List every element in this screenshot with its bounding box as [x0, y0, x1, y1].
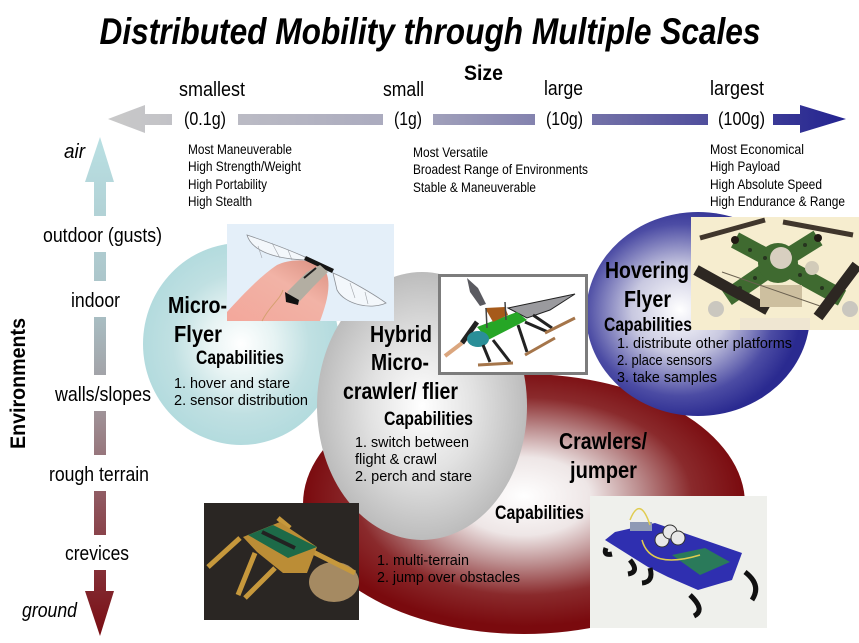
- smallest traits: High Strength/Weight: [188, 158, 301, 174]
- size scale labels: (0.1g): [184, 109, 226, 129]
- hybrid capabilities: [355, 409, 473, 485]
- largest traits: High Payload: [710, 158, 780, 174]
- micro-flyer heading: Flyer: [174, 321, 222, 347]
- environments labels: indoor: [71, 290, 120, 312]
- hybrid capabilities: Capabilities: [384, 409, 473, 430]
- size scale labels: largest: [710, 78, 764, 100]
- largest traits: Most Economical: [710, 141, 804, 157]
- crawlers capabilities: Capabilities: [495, 503, 584, 524]
- title: Distributed Mobility through Multiple Scales: [100, 11, 760, 52]
- crawlers heading: [559, 428, 648, 483]
- hybrid capabilities: 1. switch between: [355, 435, 469, 451]
- hovering flyer capabilities: 1. distribute other platforms: [617, 336, 792, 352]
- hybrid heading: Hybrid: [370, 321, 432, 347]
- environments axis title: Environments: [7, 318, 30, 449]
- crawlers capabilities: 1. multi-terrain: [377, 553, 469, 569]
- ellipse: hovering flyer: [586, 212, 810, 416]
- size scale labels: [179, 62, 765, 129]
- crawlers heading: Crawlers/: [559, 428, 648, 454]
- micro-flyer capabilities: 1. hover and stare: [174, 376, 290, 392]
- largest traits: High Absolute Speed: [710, 176, 822, 192]
- size scale labels: (100g): [718, 109, 765, 129]
- small/large traits: Stable & Maneuverable: [413, 179, 536, 195]
- hybrid heading: [343, 321, 458, 404]
- small/large traits: Most Versatile: [413, 144, 488, 160]
- micro-flyer capabilities: Capabilities: [196, 348, 284, 369]
- environments labels: ground: [22, 600, 78, 622]
- small/large traits: Broadest Range of Environments: [413, 161, 588, 177]
- hovering flyer capabilities: 3. take samples: [617, 370, 717, 386]
- environments labels: rough terrain: [49, 464, 149, 486]
- hovering flyer capabilities: Capabilities: [604, 315, 692, 336]
- environments labels: air: [64, 141, 86, 163]
- smallest traits: High Portability: [188, 176, 267, 192]
- micro-flyer heading: [168, 292, 227, 347]
- size scale labels: small: [383, 79, 424, 101]
- crawlers capabilities: [377, 503, 584, 586]
- small/large traits: [413, 144, 588, 195]
- size scale arrow: [108, 105, 846, 133]
- hovering flyer heading: [605, 257, 689, 312]
- ellipse: hybrid crawler/flier: [317, 272, 527, 540]
- ellipse: crawlers/jumper: [303, 374, 745, 634]
- smallest traits: High Stealth: [188, 193, 252, 209]
- hovering flyer heading: Flyer: [624, 286, 671, 312]
- hybrid heading: crawler/ flier: [343, 378, 458, 404]
- environments labels: outdoor (gusts): [43, 225, 162, 247]
- photo: micro-flyer on finger: [227, 224, 394, 321]
- size scale labels: (1g): [394, 109, 422, 129]
- hybrid heading: Micro-: [371, 349, 429, 375]
- micro-flyer capabilities: 2. sensor distribution: [174, 393, 308, 409]
- size scale labels: smallest: [179, 79, 245, 101]
- size scale labels: Size: [464, 62, 503, 85]
- ellipse: micro-flyer: [143, 243, 339, 445]
- environments labels: [22, 141, 162, 622]
- size scale labels: large: [544, 78, 583, 100]
- crawlers heading: jumper: [569, 457, 637, 483]
- micro-flyer heading: Micro-: [168, 292, 227, 318]
- micro-flyer capabilities: [174, 348, 308, 409]
- size scale labels: (10g): [546, 109, 583, 129]
- photo: quadrotor: [691, 217, 859, 330]
- hybrid capabilities: flight & crawl: [355, 452, 437, 468]
- hybrid capabilities: 2. perch and stare: [355, 469, 472, 485]
- largest traits: [710, 141, 845, 209]
- environments labels: crevices: [65, 543, 129, 565]
- crawlers capabilities: 2. jump over obstacles: [377, 570, 520, 586]
- hovering flyer capabilities: [604, 315, 792, 386]
- hovering flyer capabilities: 2. place sensors: [617, 353, 712, 369]
- environments axis arrow: [85, 137, 114, 636]
- hovering flyer heading: Hovering: [605, 257, 689, 283]
- photo: hexapod crawler: [590, 496, 767, 628]
- smallest traits: Most Maneuverable: [188, 141, 292, 157]
- photo: hybrid robot drawing: [440, 276, 586, 374]
- photo: micro crawler with coin: [204, 503, 359, 620]
- environments labels: walls/slopes: [54, 384, 151, 406]
- smallest traits: [188, 141, 301, 209]
